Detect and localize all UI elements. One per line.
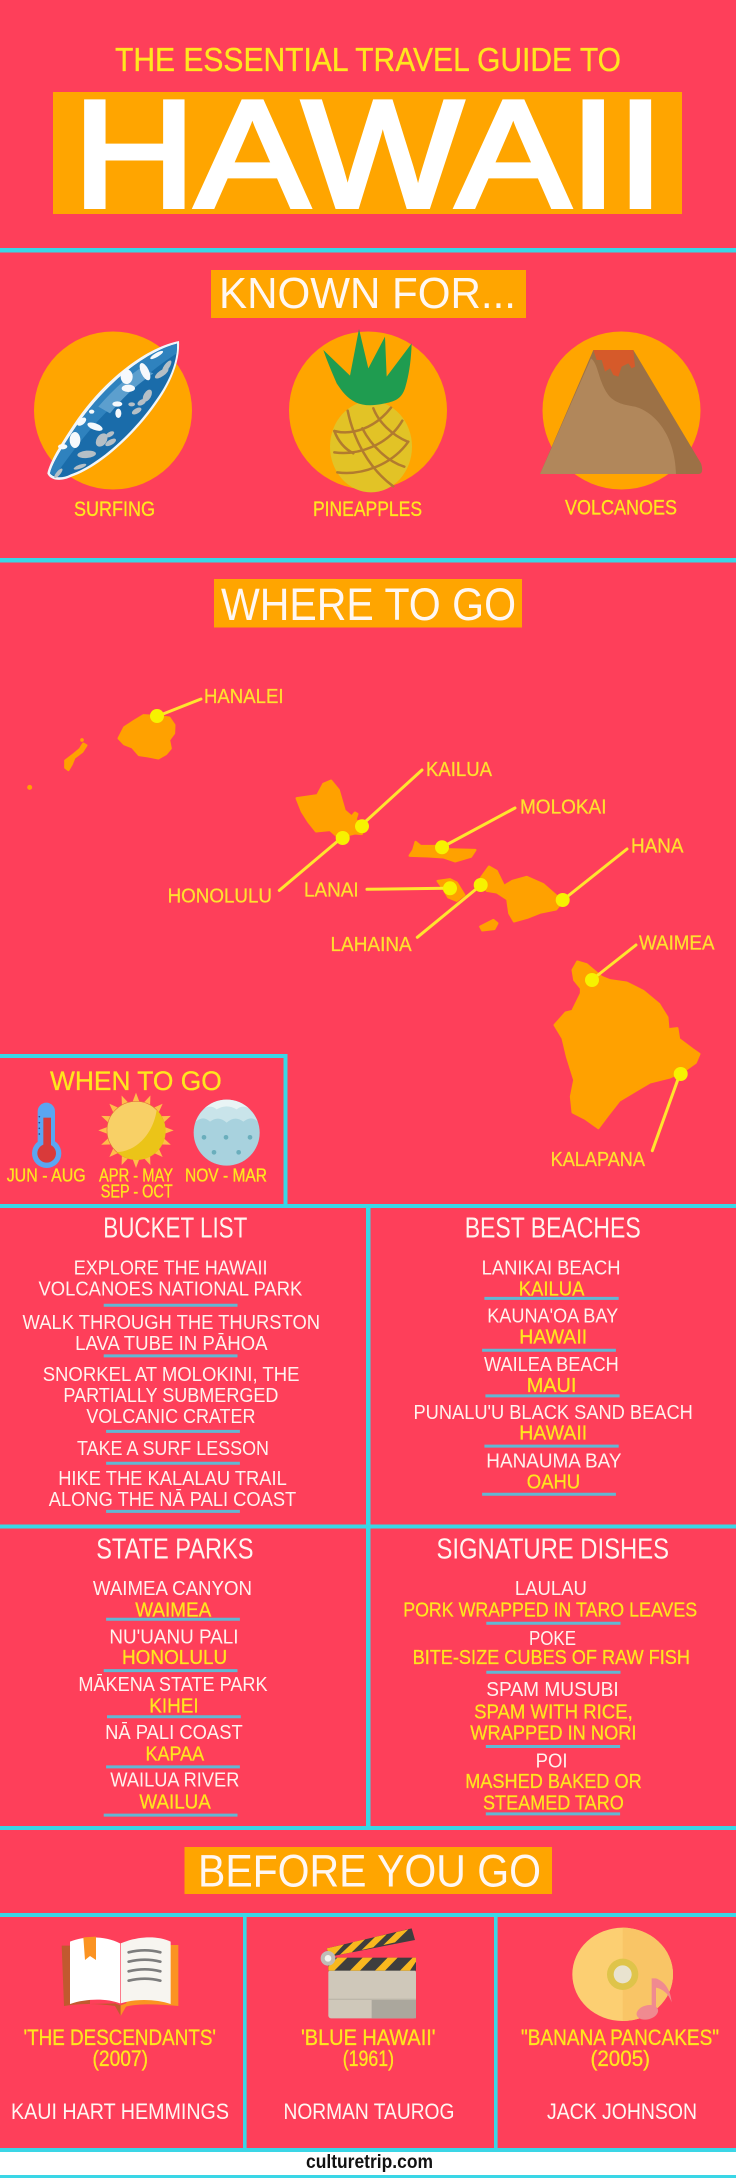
item: punalu'u black sand beach: PUNALU'U BLACK SAND BEACH bbox=[414, 1401, 693, 1424]
heading: signature dishes: SIGNATURE DISHES bbox=[436, 1533, 669, 1565]
footer: culturetrip.com bbox=[0, 2152, 736, 2175]
item: na pali coast: NĀ PALI COAST bbox=[105, 1721, 243, 1744]
item: kauna'oa bay: KAUNA'OA BAY bbox=[487, 1304, 618, 1327]
item: laulau: LAULAU bbox=[515, 1577, 587, 1600]
panel: best beaches bbox=[414, 1213, 693, 1494]
panel: where to go bbox=[0, 579, 715, 1206]
item: na pali coast bbox=[105, 1721, 243, 1767]
icon: sun bbox=[98, 1093, 174, 1168]
item: spam musubi bbox=[470, 1678, 636, 1746]
item: spam musubi: SPAM MUSUBI bbox=[486, 1678, 619, 1701]
item: explore volcanoes national park: VOLCANOES NATIONAL PARK bbox=[38, 1278, 303, 1300]
heading: before you go: BEFORE YOU GO bbox=[198, 1846, 541, 1897]
item: snorkel at molokini: SNORKEL AT MOLOKINI, THE bbox=[43, 1363, 299, 1386]
heading: where to go: WHERE TO GO bbox=[221, 579, 516, 630]
panel: when to go bbox=[0, 1054, 288, 1206]
item: nu'uanu pali bbox=[104, 1625, 238, 1671]
marker: Honolulu: HONOLULU bbox=[168, 885, 272, 908]
panel: signature dishes bbox=[403, 1533, 697, 1814]
item: wailea beach: WAILEA BEACH bbox=[484, 1353, 619, 1376]
item: poi bbox=[465, 1749, 642, 1814]
icon: surfboard bbox=[34, 332, 192, 490]
item: kauna'oa bay: HAWAII bbox=[519, 1325, 587, 1348]
heading: when to go: WHEN TO GO bbox=[50, 1066, 222, 1096]
icon: volcano bbox=[540, 332, 702, 490]
icon: clapperboard bbox=[321, 1928, 416, 2018]
item: kauna'oa bay bbox=[482, 1304, 618, 1350]
icon: thermometer bbox=[32, 1103, 61, 1168]
item: explore volcanoes national park: EXPLORE THE HAWAII bbox=[74, 1256, 268, 1279]
item: wailea beach bbox=[484, 1353, 620, 1397]
label: apr - may, sep - oct: SEP - OCT bbox=[101, 1181, 173, 1202]
title line: THE ESSENTIAL TRAVEL GUIDE TO bbox=[115, 42, 621, 79]
marker: Lanai bbox=[304, 878, 457, 902]
item: thurston lava tube: LAVA TUBE IN PĀHOA bbox=[75, 1332, 268, 1355]
icon: music disc bbox=[572, 1928, 673, 2022]
item: makena state park bbox=[78, 1673, 268, 1718]
panel: book bbox=[11, 1937, 229, 2124]
icon: pineapple bbox=[289, 329, 447, 492]
item: waimea canyon bbox=[93, 1577, 252, 1621]
heading: known for: KNOWN FOR... bbox=[219, 270, 516, 318]
text: blue hawaii: 'BLUE HAWAII' bbox=[301, 2025, 436, 2050]
label: apr - may, sep - oct bbox=[99, 1165, 173, 1202]
item: makena state park: KIHEI bbox=[149, 1695, 199, 1718]
heading: state parks: STATE PARKS bbox=[96, 1533, 254, 1565]
marker: Lahaina bbox=[330, 878, 488, 956]
item: hanauma bay bbox=[482, 1449, 622, 1494]
item: surf lesson: TAKE A SURF LESSON bbox=[77, 1437, 269, 1460]
text: blue hawaii bbox=[301, 2025, 436, 2071]
item: wailua river: WAILUA RIVER bbox=[110, 1768, 239, 1792]
marker: Kailua bbox=[355, 758, 492, 833]
panel: bucket list bbox=[22, 1213, 320, 1511]
item: punalu'u black sand beach: HAWAII bbox=[519, 1422, 587, 1445]
marker: Kalapana bbox=[551, 1067, 688, 1171]
label: pineapples: PINEAPPLES bbox=[313, 498, 422, 521]
label: surfing: SURFING bbox=[74, 498, 155, 521]
label: volcanoes: VOLCANOES bbox=[565, 496, 677, 520]
item: punalu'u black sand beach bbox=[414, 1401, 693, 1446]
item: snorkel at molokini bbox=[43, 1363, 299, 1431]
icon: book bbox=[62, 1937, 178, 2016]
item: makena state park: MĀKENA STATE PARK bbox=[78, 1673, 268, 1696]
text: banana pancakes: (2005) bbox=[590, 2046, 650, 2071]
item: wailua river bbox=[104, 1768, 239, 1815]
text: the descendants bbox=[24, 2025, 216, 2071]
text: blue hawaii: (1961) bbox=[343, 2046, 394, 2071]
Hawaii banner: HAWAII bbox=[73, 70, 664, 240]
marker: Hanalei bbox=[150, 685, 284, 723]
islands: Kauai and Niihau bbox=[28, 715, 174, 789]
label: jun - aug: JUN - AUG bbox=[7, 1165, 86, 1186]
text: the descendants: 'THE DESCENDANTS' bbox=[24, 2025, 216, 2050]
heading: best beaches: BEST BEACHES bbox=[465, 1213, 641, 1245]
item: waimea canyon: WAIMEA bbox=[135, 1598, 211, 1621]
marker: Kalapana: KALAPANA bbox=[551, 1148, 645, 1171]
item: poi: MASHED BAKED OR bbox=[465, 1770, 642, 1793]
panel: state parks bbox=[78, 1533, 268, 1815]
item: laulau: PORK WRAPPED IN TARO LEAVES bbox=[403, 1598, 697, 1621]
item: hanauma bay: OAHU bbox=[527, 1471, 580, 1494]
panel: known for bbox=[34, 270, 702, 521]
marker: Hana: HANA bbox=[631, 834, 684, 857]
item: hanauma bay: HANAUMA BAY bbox=[486, 1449, 622, 1472]
item: poke bbox=[413, 1627, 690, 1672]
marker: Hanalei: HANALEI bbox=[204, 685, 284, 708]
item: waimea canyon: WAIMEA CANYON bbox=[93, 1577, 252, 1600]
marker: Lahaina: LAHAINA bbox=[330, 933, 412, 956]
item: nu'uanu pali: NU'UANU PALI bbox=[109, 1625, 239, 1648]
icon: rain bbox=[194, 1100, 260, 1166]
marker: Hana bbox=[556, 834, 684, 907]
item: poke: POKE bbox=[529, 1627, 576, 1650]
item: nu'uanu pali: HONOLULU bbox=[122, 1646, 227, 1669]
island: Hawaii (Big Island) bbox=[555, 962, 699, 1128]
marker: Molokai bbox=[435, 796, 606, 854]
item: kalalau trail bbox=[49, 1467, 297, 1511]
text: banana pancakes bbox=[521, 2025, 719, 2071]
marker: Honolulu bbox=[168, 831, 350, 908]
marker: Molokai: MOLOKAI bbox=[520, 796, 606, 819]
item: thurston lava tube bbox=[22, 1311, 320, 1356]
item: poi: STEAMED TARO bbox=[483, 1791, 624, 1814]
item: explore volcanoes national park bbox=[38, 1256, 303, 1305]
item: spam musubi: SPAM WITH RICE, bbox=[474, 1700, 633, 1723]
heading: bucket list: BUCKET LIST bbox=[103, 1213, 247, 1245]
item: laulau bbox=[403, 1577, 697, 1623]
item: lanikai beach: LANIKAI BEACH bbox=[482, 1256, 620, 1279]
item: kalalau trail: ALONG THE NĀ PALI COAST bbox=[49, 1488, 297, 1511]
label: nov - mar: NOV - MAR bbox=[185, 1165, 267, 1186]
item: wailua river: WAILUA bbox=[139, 1791, 211, 1814]
footer: culturetrip.com: culturetrip.com bbox=[306, 2152, 433, 2173]
item: na pali coast: KAPAA bbox=[146, 1742, 204, 1765]
item: lanikai beach: KAILUA bbox=[519, 1278, 585, 1300]
item: poi: POI bbox=[536, 1749, 568, 1772]
panel: music bbox=[521, 1928, 719, 2124]
marker: Lanai: LANAI bbox=[304, 878, 359, 902]
title bbox=[53, 42, 682, 240]
marker: Waimea bbox=[585, 932, 715, 987]
item: snorkel at molokini: VOLCANIC CRATER bbox=[86, 1405, 255, 1428]
item: thurston lava tube: WALK THROUGH THE THURSTON bbox=[22, 1311, 320, 1334]
item: poke: BITE-SIZE CUBES OF RAW FISH bbox=[413, 1646, 690, 1669]
marker: Waimea: WAIMEA bbox=[639, 932, 715, 955]
label: apr - may, sep - oct: APR - MAY bbox=[99, 1165, 173, 1186]
item: wailea beach: MAUI bbox=[527, 1374, 576, 1397]
item: spam musubi: WRAPPED IN NORI bbox=[470, 1722, 636, 1745]
item: kalalau trail: HIKE THE KALALAU TRAIL bbox=[58, 1467, 287, 1490]
islands: Oahu, Molokai, Lanai, Maui, Kahoolawe bbox=[297, 781, 562, 930]
text: author: KAUI HART HEMMINGS bbox=[11, 2099, 229, 2124]
map of the Hawaiian islands bbox=[28, 685, 715, 1171]
text: the descendants: (2007) bbox=[92, 2046, 148, 2071]
text: director: NORMAN TAUROG bbox=[284, 2099, 454, 2124]
marker: Kailua: KAILUA bbox=[426, 758, 492, 781]
text: artist: JACK JOHNSON bbox=[547, 2099, 697, 2124]
panel: film bbox=[284, 1928, 454, 2124]
item: lanikai beach bbox=[482, 1256, 620, 1300]
item: snorkel at molokini: PARTIALLY SUBMERGED bbox=[63, 1384, 278, 1407]
